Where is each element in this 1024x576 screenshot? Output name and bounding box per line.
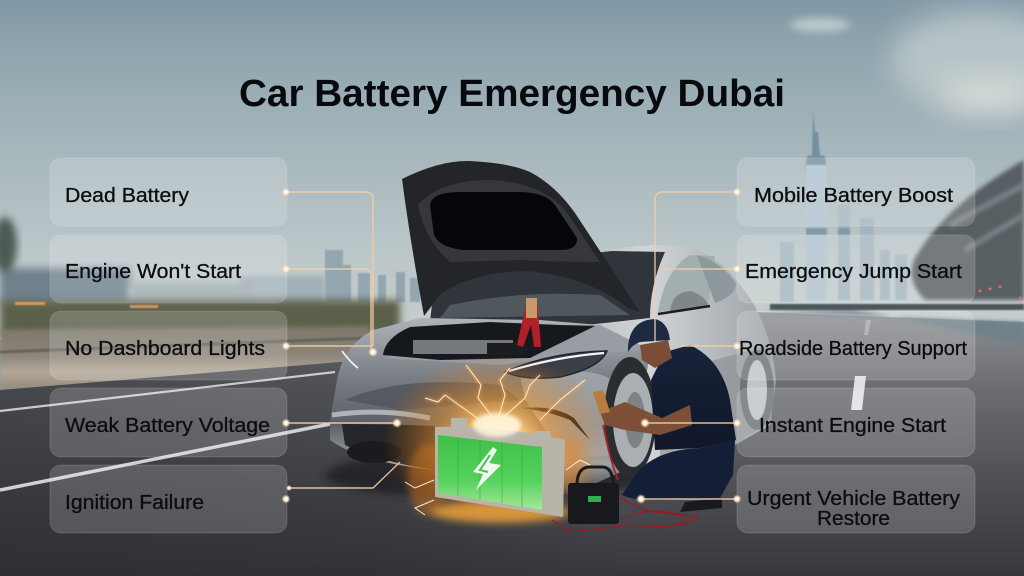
green cells	[438, 435, 542, 510]
bright spark core	[473, 413, 521, 437]
vegetation left	[0, 300, 400, 336]
panel: Instant Engine Start	[737, 388, 975, 457]
face	[640, 340, 672, 368]
rear wheel	[740, 350, 774, 430]
panel: Weak Battery Voltage	[50, 388, 287, 457]
panel: Urgent Vehicle Battery Restore: Urgent Vehicle Battery	[747, 488, 960, 510]
panel: Dead Battery	[50, 158, 287, 226]
panel: Emergency Jump Start: Emergency Jump Start	[745, 261, 962, 283]
car	[325, 161, 776, 499]
lower door shade	[660, 345, 772, 460]
terminals	[451, 418, 467, 429]
overpass right	[912, 160, 1024, 300]
cap	[628, 319, 670, 352]
panel: Ignition Failure	[50, 465, 287, 533]
side mirror	[670, 291, 709, 312]
road	[0, 310, 1024, 576]
panel: Ignition Failure: Ignition Failure	[65, 492, 204, 514]
red jump clamps	[517, 298, 541, 347]
trousers	[622, 440, 735, 500]
forearm and hands	[600, 402, 692, 435]
headlights	[505, 351, 607, 378]
red cables	[552, 497, 698, 532]
panel: Mobile Battery Boost: Mobile Battery Boost	[754, 185, 953, 207]
shirt	[651, 345, 736, 450]
guard rail	[0, 326, 370, 392]
panel: Roadside Battery Support: Roadside Battery Support	[739, 338, 967, 360]
panel: Urgent Vehicle Battery Restore	[737, 465, 975, 533]
panel: Emergency Jump Start	[737, 235, 975, 303]
distant skyline left	[325, 250, 420, 302]
panel: Roadside Battery Support	[737, 311, 975, 380]
rear body and roof	[520, 245, 776, 470]
panel: Dead Battery: Dead Battery	[65, 185, 189, 207]
panel: Engine Won't Start	[50, 235, 287, 303]
right panels	[737, 158, 975, 533]
title: Car Battery Emergency Dubai	[239, 73, 785, 115]
connector dots	[282, 188, 742, 504]
panel: Instant Engine Start: Instant Engine Start	[759, 415, 946, 437]
hood raised	[402, 161, 640, 316]
panel: No Dashboard Lights	[50, 311, 287, 380]
mechanic	[593, 319, 736, 512]
left panels	[50, 158, 287, 533]
panel: Urgent Vehicle Battery Restore: Restore	[817, 508, 890, 530]
sparks	[382, 355, 612, 525]
connector lines	[286, 192, 737, 499]
front wheel	[604, 357, 656, 477]
panel: Engine Won't Start: Engine Won't Start	[65, 261, 241, 283]
front body	[330, 318, 650, 495]
panel: Mobile Battery Boost	[737, 158, 975, 226]
car battery	[435, 413, 565, 517]
skyline right with tower	[780, 110, 907, 302]
bolt icon	[473, 447, 501, 490]
ground shadow	[325, 451, 655, 499]
cable in hands	[593, 390, 610, 414]
panel: No Dashboard Lights: No Dashboard Lights	[65, 338, 265, 360]
lower bumper	[342, 424, 435, 470]
windshield	[430, 251, 665, 328]
side windows	[658, 255, 715, 312]
casing	[435, 427, 565, 517]
portable jump pack	[552, 467, 698, 532]
road markings	[0, 372, 335, 411]
engine bay	[383, 322, 595, 360]
panel: Weak Battery Voltage: Weak Battery Voltage	[65, 415, 270, 437]
